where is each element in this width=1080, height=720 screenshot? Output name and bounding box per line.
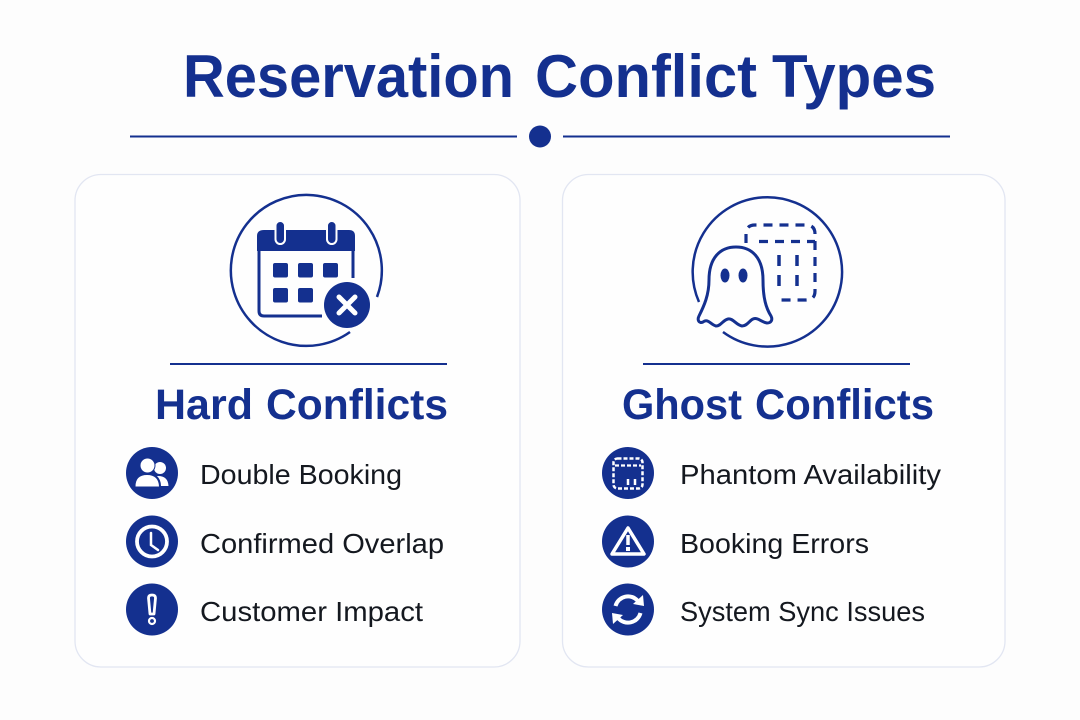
panel background — [75, 174, 520, 667]
panel: ghost conflicts — [562, 174, 1005, 667]
title: Conflict — [535, 43, 757, 110]
heading: ghost conflicts — [622, 382, 934, 429]
heading: hard conflicts: Hard — [155, 382, 253, 429]
icon: ghost with dashed calendar — [693, 197, 842, 347]
list item: booking errors: Booking Errors — [680, 528, 869, 559]
title — [183, 43, 936, 110]
list item: confirmed overlap — [126, 516, 444, 568]
list item: phantom availability — [602, 447, 941, 499]
list item: phantom availability: Phantom Availability — [680, 459, 941, 490]
title: Reservation — [183, 43, 514, 110]
panel: hard conflicts — [75, 174, 520, 667]
heading: hard conflicts — [155, 382, 448, 429]
list item: booking errors — [602, 516, 869, 568]
divider — [170, 363, 447, 365]
list item: system sync issues — [602, 584, 925, 636]
list item: double booking — [126, 447, 402, 499]
icon: calendar with x badge — [231, 195, 382, 346]
title divider with dot — [130, 126, 950, 148]
list item: customer impact — [126, 584, 423, 636]
list item: double booking: Double Booking — [200, 459, 402, 490]
list item: customer impact: Customer Impact — [200, 596, 423, 627]
divider — [643, 363, 910, 365]
panel background — [562, 174, 1005, 667]
heading: ghost conflicts: Conflicts — [755, 382, 934, 429]
list item: system sync issues: System Sync Issues — [680, 596, 925, 627]
list item: confirmed overlap: Confirmed Overlap — [200, 528, 444, 559]
heading: hard conflicts: Conflicts — [266, 382, 448, 429]
heading: ghost conflicts: Ghost — [622, 382, 742, 429]
title: Types — [772, 43, 936, 110]
